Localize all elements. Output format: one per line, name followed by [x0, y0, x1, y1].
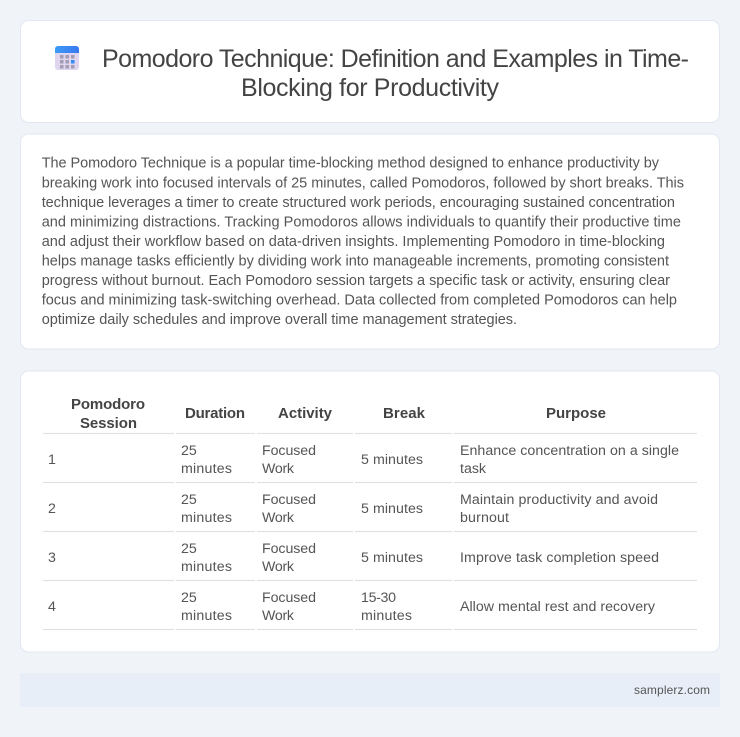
table row 2: 5 minutes: [361, 501, 423, 517]
text block: description paragraph: progress without burnout. Each Pomodoro session targets a specific task or activity, ensuring clear: [42, 273, 670, 289]
table row 2: Maintain productivity and avoid: [460, 492, 658, 508]
table header row: Pomodoro: [71, 396, 145, 413]
table row 3: Improve task completion speed: [460, 550, 659, 566]
table row 4: Focused: [262, 590, 316, 606]
table header row: Break: [383, 405, 426, 422]
title: Pomodoro Technique: Definition and Examples in Time-: [102, 45, 689, 73]
text block: description paragraph: The Pomodoro Technique is a popular time-blocking method designed to enhance productivity by: [42, 156, 660, 172]
table row 1: [48, 443, 679, 477]
table row 4: [48, 590, 656, 624]
panel: description: [20, 134, 720, 349]
table row 3: 5 minutes: [361, 550, 423, 566]
text block: description paragraph: breaking work into focused intervals of 25 minutes, called Pomodoros, followed by short breaks. This: [42, 175, 684, 191]
table row 3: Focused: [262, 541, 316, 557]
table row 1: task: [460, 461, 487, 477]
title: [102, 45, 689, 102]
text block: description paragraph: and minimizing distractions. Tracking Pomodoros allows individuals to quantify their productive time: [42, 214, 681, 230]
table row 2: 2: [48, 501, 56, 517]
table row 3: minutes: [181, 559, 232, 575]
table row 2: Focused: [262, 492, 316, 508]
table row 4: minutes: [361, 608, 412, 624]
text block: description paragraph: [42, 156, 684, 328]
text block: description paragraph: helps manage tasks efficiently by dividing work into manageable increments, promoting consistent: [42, 254, 669, 270]
text block: description paragraph: optimize daily schedules and improve overall time management strategies.: [42, 312, 517, 328]
icon: calendar: [55, 46, 79, 70]
table row 4: 4: [48, 599, 56, 615]
title: Blocking for Productivity: [241, 74, 500, 102]
table row 2: Work: [262, 510, 295, 526]
footer bar: samplerz.com: [634, 683, 710, 697]
table row 4: Work: [262, 608, 295, 624]
table row 1: minutes: [181, 461, 232, 477]
table row 3: 3: [48, 550, 56, 566]
table row 1: 1: [48, 452, 56, 468]
table row 3: 25: [181, 541, 197, 557]
table row 1: Enhance concentration on a single: [460, 443, 679, 459]
panel: table: [20, 371, 720, 652]
table row 2: burnout: [460, 510, 509, 526]
text block: description paragraph: technique leverages a timer to create structured work periods, encouraging sustained concentration: [42, 195, 675, 211]
text block: description paragraph: focus and minimizing task-switching overhead. Data collected from completed Pomodoros can help: [42, 293, 677, 309]
table row 1: Focused: [262, 443, 316, 459]
table row 2: [48, 492, 658, 526]
table row 4: 15-30: [361, 590, 396, 606]
table row 4: Allow mental rest and recovery: [460, 599, 656, 615]
table row 3: [48, 541, 659, 575]
text block: description paragraph: and adjust their workflow based on data-driven insights. Implementing Pomodoro in time-blocking: [42, 234, 665, 250]
table row 2: minutes: [181, 510, 232, 526]
table row 4: 25: [181, 590, 197, 606]
table header row: [71, 396, 606, 432]
table header row: Duration: [185, 405, 245, 422]
panel: title header: [20, 20, 720, 122]
table row 1: 25: [181, 443, 197, 459]
footer bar: [20, 673, 720, 707]
table header row: Purpose: [546, 405, 606, 422]
table header row: Session: [80, 415, 137, 432]
table row 1: 5 minutes: [361, 452, 423, 468]
table row 1: Work: [262, 461, 295, 477]
table row 3: Work: [262, 559, 295, 575]
table row 4: minutes: [181, 608, 232, 624]
table row 2: 25: [181, 492, 197, 508]
table header row: Activity: [278, 405, 333, 422]
